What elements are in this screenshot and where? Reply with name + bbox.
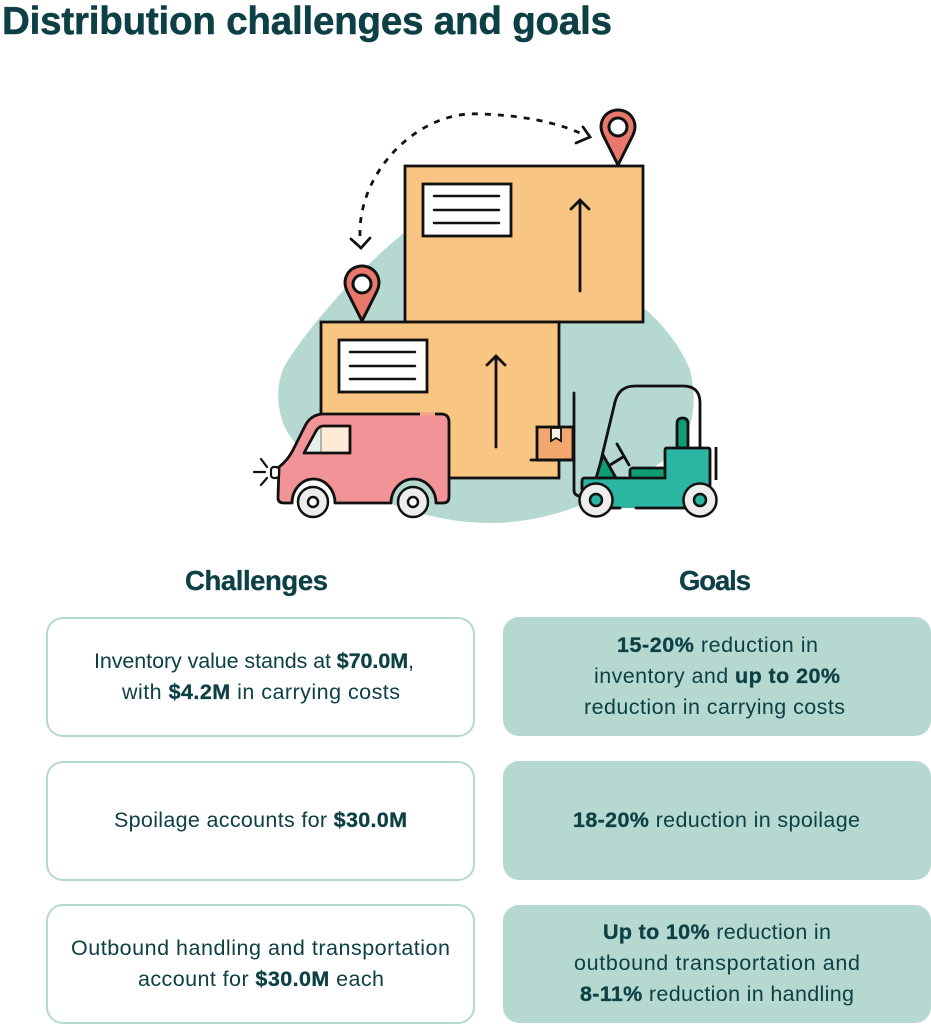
- challenge card 2: spoilage: Spoilage accounts for $30.0M: [114, 808, 407, 832]
- goal card 2: spoilage: 18-20% reduction in spoilage: [573, 808, 860, 832]
- goal card 1: inventory: [503, 617, 931, 736]
- challenge card 3: handling and transportation: Outbound handling and transportation: [71, 936, 450, 960]
- illustration: boxes, delivery van and forklift: [254, 110, 716, 523]
- arrow: dashed route between pins: [351, 114, 590, 248]
- upper box: [405, 166, 643, 322]
- challenge card 1: inventory: Inventory value stands at $70.0M,: [94, 649, 414, 673]
- challenge card 1: inventory: with $4.2M in carrying costs: [121, 680, 400, 704]
- icon: forklift with small parcel: [531, 386, 716, 516]
- challenge card 3: handling and transportation: account for $30.0M each: [138, 967, 384, 991]
- heading: Challenges: Challenges: [185, 565, 328, 596]
- icon: lower location pin: [345, 266, 379, 321]
- goal card 1: inventory: inventory and up to 20%: [594, 664, 840, 688]
- challenge card 2: spoilage: [47, 762, 474, 880]
- goal card 1: inventory: 15-20% reduction in: [617, 633, 818, 657]
- icon: upper location pin: [601, 110, 635, 165]
- lower box: [321, 322, 559, 478]
- goal card 3: transportation and handling: 8-11% reduction in handling: [580, 982, 854, 1006]
- goal card 1: inventory: reduction in carrying costs: [584, 695, 845, 719]
- challenge card 3: handling and transportation: [47, 905, 474, 1023]
- title: Distribution challenges and goals: [2, 0, 612, 43]
- challenge card 1: inventory: [47, 618, 474, 736]
- background blob: [278, 200, 694, 523]
- goal card 3: transportation and handling: Up to 10% reduction in: [603, 920, 831, 944]
- goal card 3: transportation and handling: outbound transportation and: [574, 951, 860, 975]
- goal card 3: transportation and handling: [503, 905, 931, 1023]
- goal card 2: spoilage: [503, 761, 931, 880]
- heading: Goals: Goals: [679, 565, 751, 596]
- icon: delivery van: [254, 414, 449, 517]
